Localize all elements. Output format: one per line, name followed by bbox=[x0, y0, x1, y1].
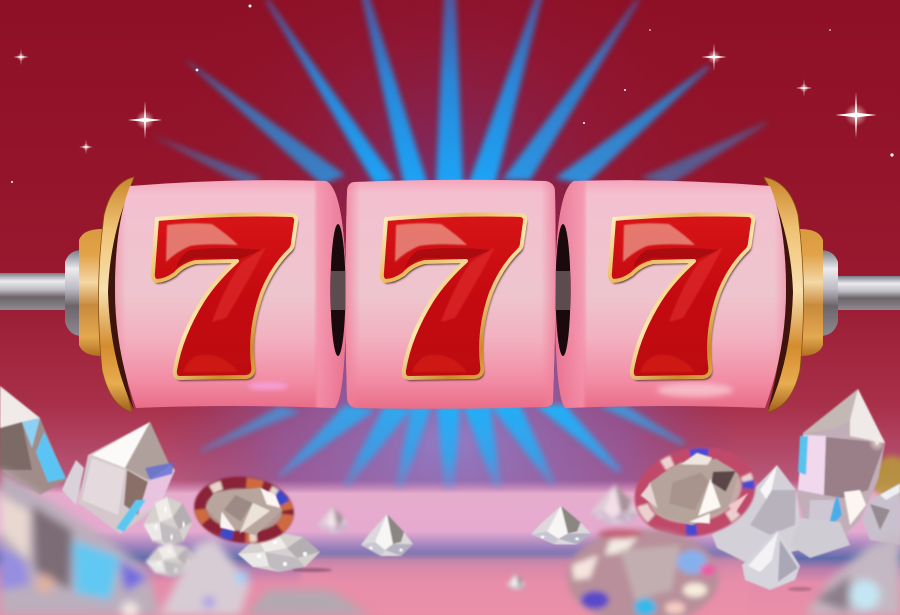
reel: drum body bbox=[115, 180, 346, 408]
foreground gem: blurred right corner bbox=[805, 535, 900, 615]
seven symbol bbox=[382, 214, 527, 380]
gem: low diamond beneath round gem bbox=[238, 532, 320, 572]
gem: right round brilliant bbox=[626, 437, 764, 547]
gem rim: blurred multicolour facets bbox=[191, 473, 297, 547]
gem: small centre diamond bbox=[361, 514, 413, 556]
seven symbol bbox=[610, 214, 755, 380]
gem rim: blurred multicolour facets bbox=[626, 437, 764, 547]
crystal: left large bbox=[78, 422, 175, 534]
gem: far centre left bbox=[317, 507, 349, 532]
sparkle stars bbox=[11, 4, 894, 183]
rays below reels bbox=[200, 405, 686, 488]
blue light rays bbox=[150, 0, 768, 488]
star: upper right bbox=[701, 43, 727, 71]
left hub bbox=[65, 177, 134, 412]
reel: edge shading bbox=[346, 180, 556, 409]
gem: floor shadow under low diamond bbox=[292, 568, 332, 572]
hub: gold ring bbox=[764, 177, 804, 412]
crystal: far left bbox=[0, 386, 66, 495]
foreground gem: blurred left cluster bbox=[0, 468, 370, 615]
crystal: right edge bbox=[862, 483, 900, 545]
crystal: small behind left bbox=[62, 460, 84, 505]
gem: far small floor bbox=[507, 574, 525, 589]
reel: iridescent glint bbox=[248, 382, 288, 390]
floor: pink surface with blue horizon bbox=[0, 480, 900, 615]
crystal: drop cluster bbox=[712, 465, 850, 562]
reel: inner axle bbox=[555, 271, 570, 310]
star: upper left bright bbox=[128, 101, 162, 139]
reel: edge shading bbox=[115, 180, 346, 408]
crystal: right tall bbox=[797, 389, 885, 545]
hub: silver collar bbox=[65, 250, 82, 336]
left axle rod bbox=[0, 273, 70, 310]
crystal: drop gem in front bbox=[742, 530, 800, 590]
hub: gold cylinder bbox=[800, 229, 823, 356]
right axle rod bbox=[832, 276, 900, 310]
star: far left bbox=[13, 49, 29, 65]
blurred background gems bbox=[317, 484, 640, 589]
gem table facets bbox=[634, 444, 753, 536]
reel: side opening bbox=[330, 224, 346, 356]
reel: iridescent glint bbox=[657, 383, 733, 397]
foreground gem: blurred round brilliant bbox=[567, 529, 719, 615]
right hub bbox=[764, 177, 838, 412]
star: left small bbox=[79, 139, 93, 155]
hub: dark ring shadow bbox=[766, 180, 793, 410]
hub: gold cylinder bbox=[79, 229, 102, 356]
gem table facets bbox=[204, 482, 284, 538]
gem: left round brilliant bbox=[191, 473, 297, 547]
gem: far centre right bbox=[590, 484, 640, 524]
reel: inner axle bbox=[331, 271, 346, 310]
right reel bbox=[555, 180, 786, 408]
hub: dark ring shadow bbox=[108, 180, 134, 410]
reel: drum body bbox=[555, 180, 786, 408]
reel: drum body bbox=[346, 180, 556, 409]
gold background blur at right edge bbox=[872, 456, 900, 500]
hub: silver collar bbox=[820, 250, 838, 336]
reel: edge shading bbox=[555, 180, 786, 408]
floor: highlight tint at lower area bbox=[300, 556, 750, 615]
gem: lower left cluster bbox=[143, 497, 193, 547]
left reel bbox=[115, 180, 346, 408]
gem: lower left blurred bbox=[145, 543, 199, 577]
seven symbol bbox=[153, 214, 298, 380]
star: tiny specks bbox=[11, 4, 894, 183]
gem: floor shadow right bbox=[788, 587, 812, 591]
gem: mid right diamond bbox=[531, 506, 591, 544]
star: right bright bbox=[835, 92, 877, 138]
rays above reels bbox=[150, 0, 768, 187]
reel: side opening bbox=[556, 224, 570, 356]
star: glint on crystal bbox=[868, 434, 886, 452]
hub: gold ring bbox=[98, 177, 134, 412]
star: right small bbox=[796, 79, 812, 97]
centre reel bbox=[346, 180, 556, 409]
